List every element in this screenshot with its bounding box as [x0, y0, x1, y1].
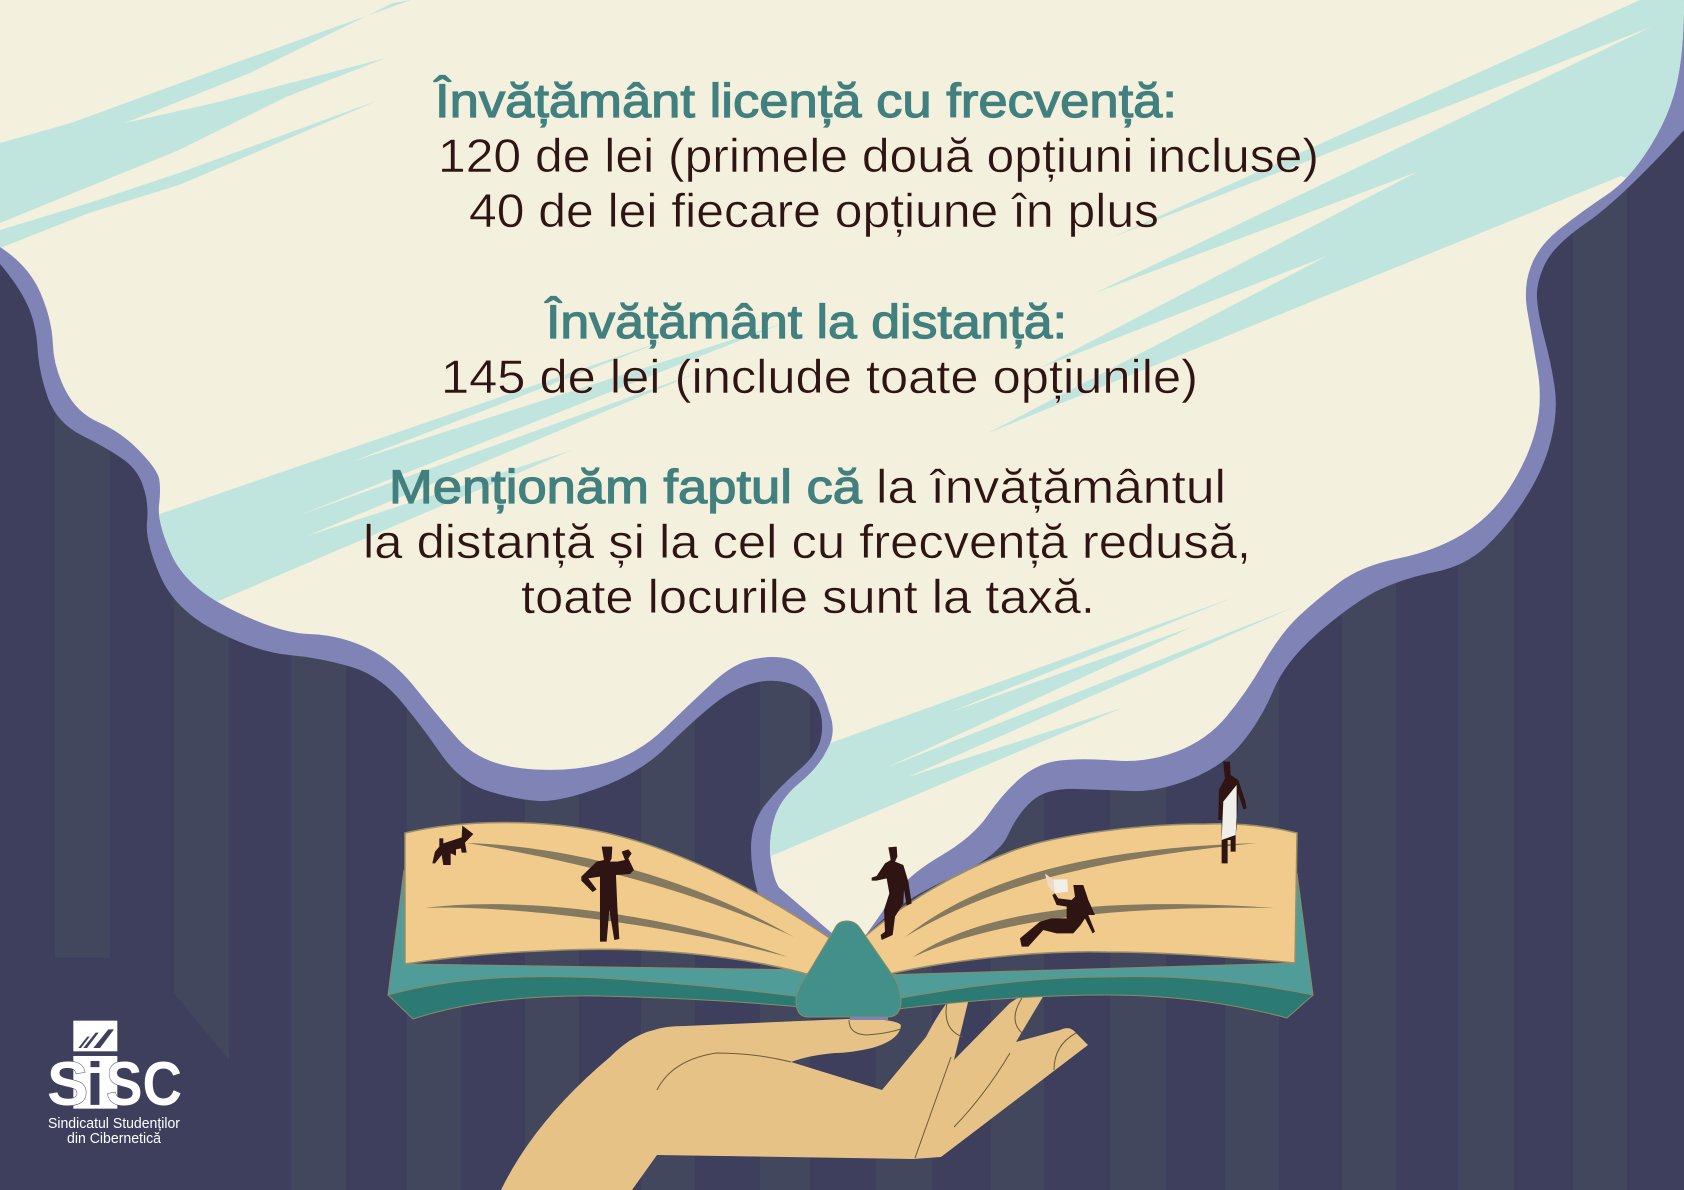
note line 3: toate locurile sunt la taxă.	[521, 570, 1095, 623]
reader body	[1020, 885, 1095, 947]
standing body	[1218, 762, 1247, 863]
fee line: 40 de lei: 40 de lei fiecare opțiune în plus	[469, 184, 1159, 237]
right cover underside	[890, 977, 1313, 1018]
smoke cloud lavender outline	[0, 0, 1684, 940]
figure: person reading	[1020, 873, 1095, 947]
hand contour lines	[657, 998, 1076, 1158]
mint streaks inside cloud	[0, 0, 1684, 869]
note line 1: la învățământul	[876, 460, 1226, 513]
figure: person in white cloth	[1218, 762, 1247, 863]
logo caption line 2: din Cibernetică	[67, 1131, 162, 1147]
icon: open book	[388, 822, 1313, 1020]
white cloth	[1222, 785, 1237, 840]
fee line: 145 de lei: 145 de lei (include toate opțiunile)	[441, 350, 1198, 403]
spine	[796, 921, 901, 1017]
heading: licență cu frecvență: Învățământ licență cu frecvență:	[433, 74, 1177, 127]
figure: man standing	[581, 847, 634, 942]
smoke cloud cream fill	[0, 0, 1684, 935]
hand shape	[501, 995, 1088, 1190]
note lead in teal: Menționăm faptul că	[389, 460, 863, 513]
logo caption line 1: Sindicatul Studenților	[48, 1116, 180, 1132]
figure: dog	[432, 826, 473, 865]
left page	[405, 822, 840, 975]
fee line: 120 de lei: 120 de lei (primele două opțiuni incluse)	[438, 129, 1319, 182]
logo: SiSC	[47, 1021, 182, 1147]
heading: la distanță: Învățământ la distanță:	[544, 295, 1067, 348]
page curl lines	[425, 843, 1277, 957]
note line 2: la distanță și la cel cu frecvență redusă,	[363, 515, 1251, 568]
logo letters: S	[47, 1050, 88, 1119]
logo letter i: i	[86, 1051, 104, 1118]
spine bottom tip	[850, 1017, 888, 1020]
text block: fees	[363, 74, 1319, 623]
right page	[855, 824, 1297, 975]
figure: person walking	[872, 847, 912, 940]
right cover	[880, 873, 1313, 1000]
logo letters SC: SC	[106, 1050, 182, 1119]
left cover	[388, 870, 812, 1000]
icon: hand holding the book	[501, 995, 1088, 1190]
left cover underside	[388, 977, 810, 1019]
logo square with slashes	[73, 1021, 117, 1109]
reader white sheet	[1053, 879, 1068, 893]
reader open sheet	[1045, 873, 1055, 893]
